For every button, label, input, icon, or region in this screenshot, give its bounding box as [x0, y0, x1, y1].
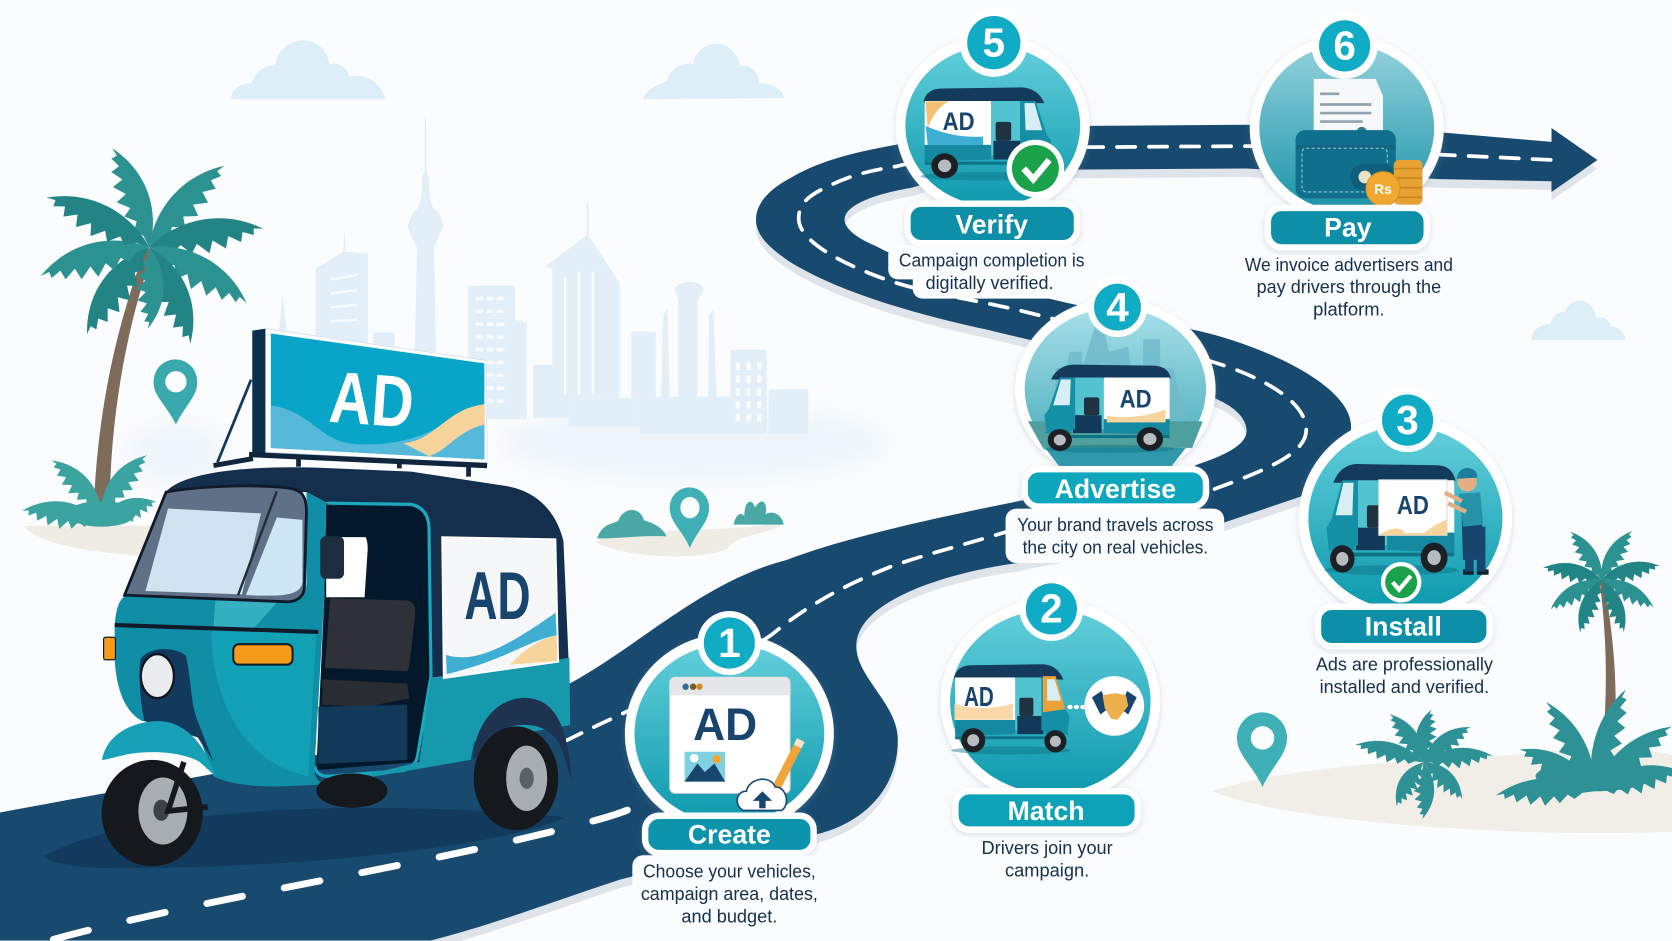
icon: coins: Rs: [1374, 181, 1392, 197]
label: Advertise: [1025, 469, 1206, 507]
description: [632, 855, 829, 930]
number 3: [1376, 388, 1440, 452]
city scene: [1028, 320, 1203, 467]
label: Create: Create: [688, 819, 771, 849]
number 2: 2: [1040, 586, 1063, 632]
number 6: [1312, 13, 1378, 79]
step 6: Pay: [1245, 13, 1453, 320]
bottom-right sand: [1212, 749, 1672, 833]
city skyline: [128, 117, 885, 483]
description: digitally verified.: [926, 273, 1054, 293]
label: Match: Match: [1008, 796, 1085, 826]
icon: coins: [1366, 160, 1422, 206]
icon: vehicle: [951, 664, 1071, 754]
road centre dashes: [53, 146, 1552, 939]
door frame: [315, 503, 431, 776]
description: campaign.: [1005, 861, 1089, 881]
number 3: 3: [1396, 397, 1419, 443]
number 1: [697, 611, 761, 675]
number 4: 4: [1106, 284, 1129, 330]
label: Install: Install: [1365, 612, 1442, 642]
description: and budget.: [681, 906, 777, 926]
label: Install: [1318, 607, 1490, 646]
step 4: Advertise: [1006, 277, 1224, 563]
icon: vehicle with ad being fitted: AD: [1397, 492, 1429, 520]
description: platform.: [1313, 300, 1385, 320]
badge disc: [940, 599, 1160, 804]
rear fender: [472, 698, 571, 780]
bush: [20, 447, 160, 537]
description: Campaign completion is: [899, 251, 1084, 271]
number 1: 1: [718, 620, 741, 666]
map pin: right: [1237, 712, 1287, 787]
step 2: Match: [940, 577, 1160, 881]
icon: wallet: [1296, 130, 1397, 198]
label: Create: [645, 816, 814, 853]
icon: handshake: [1084, 676, 1144, 736]
icon: vehicle: [1042, 365, 1174, 453]
description: [982, 838, 1113, 881]
number 5: [960, 9, 1028, 77]
icon: ad editor window: AD: [693, 698, 757, 750]
number 6: 6: [1333, 23, 1356, 69]
badge disc: [1015, 299, 1216, 480]
label: Advertise: Advertise: [1055, 474, 1176, 504]
side mirror: [320, 536, 344, 579]
label: Verify: Verify: [955, 210, 1028, 240]
billboard: AD: [327, 357, 416, 444]
description: Choose your vehicles,: [643, 862, 816, 882]
icon: vehicle: AD: [943, 109, 975, 136]
billboard: [214, 329, 487, 477]
description: Ads are professionally: [1316, 655, 1494, 675]
fronds: [1541, 525, 1662, 636]
road shadow below vehicle: [43, 808, 565, 868]
clouds: [231, 41, 1625, 340]
badge disc: [625, 633, 834, 834]
label: Pay: Pay: [1324, 213, 1372, 243]
number 2: [1019, 577, 1083, 641]
trunk: [1599, 580, 1616, 717]
front wheel and fender: [102, 721, 215, 866]
main auto-rickshaw with roof billboard: [43, 329, 571, 868]
number 4: [1088, 277, 1147, 337]
map pin: centre: [670, 487, 709, 548]
sand patch: [23, 526, 160, 557]
description: Your brand travels across: [1017, 515, 1213, 535]
icon: check: [1007, 140, 1064, 197]
small bushes and pin on sand: [595, 487, 784, 556]
number 5: 5: [983, 20, 1005, 66]
badge disc: [1250, 35, 1444, 221]
right bushes: [1353, 685, 1672, 819]
fronds: [36, 142, 266, 349]
icon: installer: [1445, 468, 1489, 575]
step 3: Install: [1299, 388, 1512, 697]
right palm tree: [1541, 525, 1662, 717]
step 1: Create: [625, 611, 834, 930]
label: Pay: [1268, 208, 1427, 247]
icon: vehicle: AD: [964, 681, 994, 712]
description: We invoice advertisers and: [1245, 255, 1453, 275]
side advertisement panel: AD: [464, 559, 531, 634]
description: [888, 245, 1095, 299]
description: [1245, 255, 1453, 320]
description: Drivers join your: [982, 838, 1113, 858]
icon: invoice: [1314, 79, 1383, 149]
left palm tree: [20, 142, 266, 557]
roof and rear canopy: [164, 467, 569, 678]
passenger seat: [318, 598, 415, 764]
icon: check: [1381, 562, 1421, 602]
cabin interior: [316, 503, 431, 770]
rear body panel: [328, 658, 570, 784]
description: [1006, 509, 1224, 563]
badge disc: [1299, 416, 1512, 621]
rear wheels: [316, 726, 558, 830]
description: pay drivers through the: [1257, 277, 1441, 297]
description: [1316, 655, 1494, 697]
description: campaign area, dates,: [641, 884, 818, 904]
map pin: left: [154, 359, 197, 424]
icon: ad editor window: [670, 677, 801, 810]
windshield: [125, 486, 306, 602]
description: the city on real vehicles.: [1023, 537, 1208, 557]
label: Match: [955, 791, 1138, 830]
cab body: [104, 492, 328, 786]
side advertisement panel: [442, 537, 558, 678]
icon: vehicle with ad being fitted: [1324, 464, 1459, 575]
connector dots: [1070, 705, 1086, 709]
trunk: [94, 247, 154, 508]
badge disc: [896, 35, 1090, 216]
label: Verify: [907, 204, 1077, 243]
description: installed and verified.: [1320, 677, 1489, 697]
step 5: Verify: [888, 9, 1095, 299]
icon: vehicle: [920, 87, 1053, 180]
icon: vehicle: AD: [1120, 386, 1152, 413]
